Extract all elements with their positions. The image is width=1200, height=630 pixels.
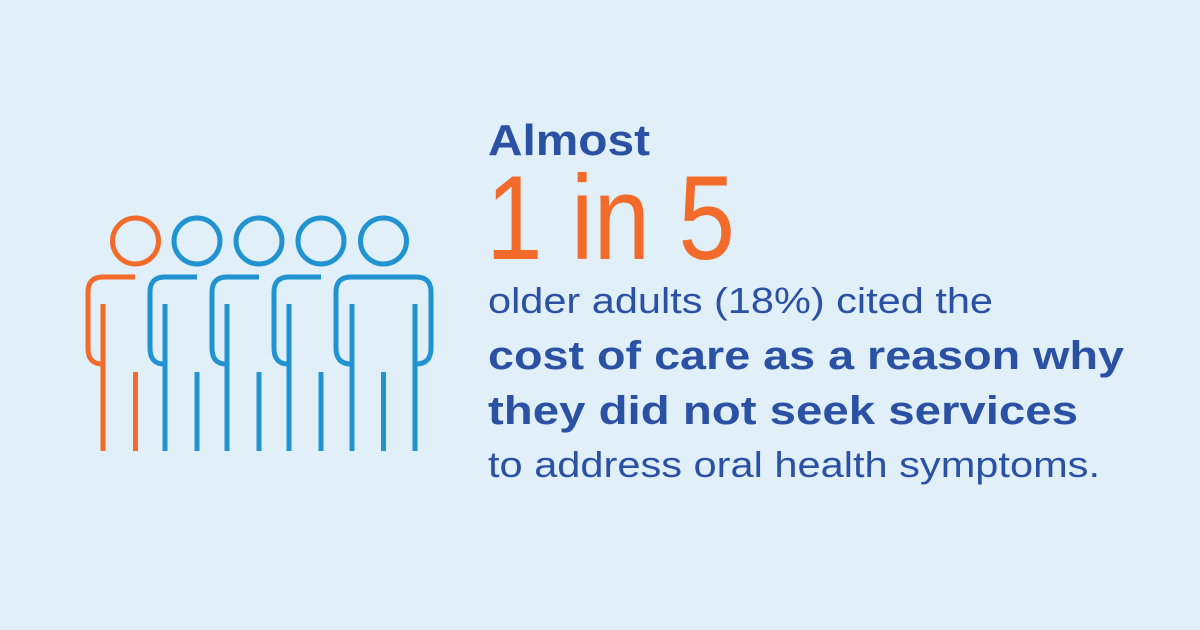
body line 4: to address oral health symptoms. bbox=[488, 444, 1100, 485]
big number: 1 in 5: 1 in 5 bbox=[486, 151, 735, 285]
heading: Almost: Almost bbox=[488, 116, 650, 165]
icon: group of five people bbox=[88, 218, 431, 451]
icon: blue person 5 bbox=[336, 218, 431, 451]
icon: blue person 4 bbox=[274, 218, 344, 451]
body line 2 bold: cost of care as a reason why bbox=[488, 334, 1125, 378]
icon: orange person bbox=[88, 218, 158, 451]
icon: blue person 2 bbox=[150, 218, 220, 451]
text block: statistic bbox=[486, 116, 1125, 485]
body line 3 bold: they did not seek services bbox=[488, 389, 1078, 433]
icon: blue person 3 bbox=[212, 218, 282, 451]
body line 1: older adults (18%) cited the bbox=[488, 280, 993, 321]
